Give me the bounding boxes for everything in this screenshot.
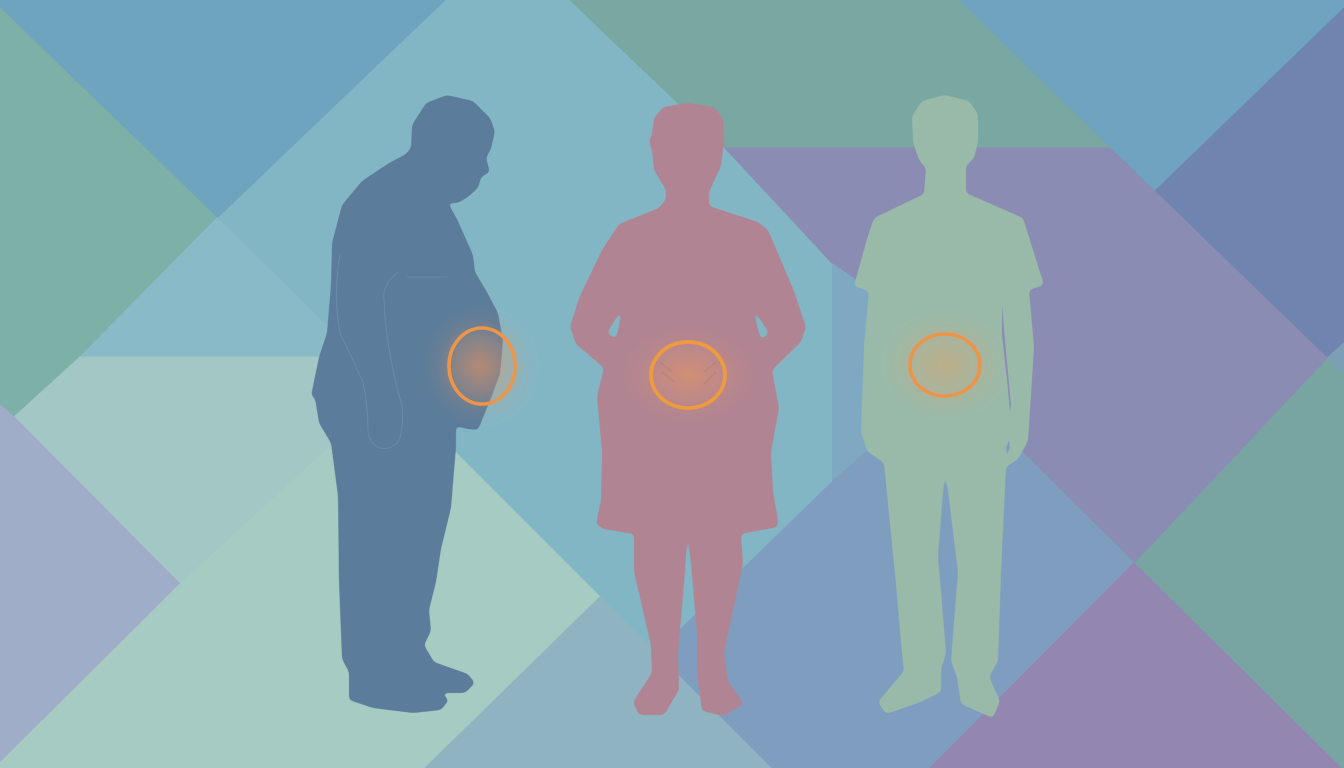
gap between arm and torso: [1002, 305, 1011, 412]
slim man abdomen glow: [879, 309, 1011, 421]
figure: slim man facing front: [854, 95, 1044, 718]
man abdomen ring: [449, 328, 515, 404]
slim man abdomen ring: [910, 334, 980, 396]
woman abdomen glow: [616, 325, 760, 425]
woman abdomen ring: [651, 342, 725, 408]
figure: man in side profile: [311, 95, 540, 713]
woman abdomen crease marks: [660, 362, 716, 384]
man arm contour lines: [336, 255, 447, 449]
man silhouette: [311, 95, 503, 713]
woman silhouette: [570, 103, 806, 716]
slim man silhouette: [854, 95, 1044, 718]
figure: woman facing front: [570, 103, 806, 716]
man abdomen glow: [420, 304, 540, 428]
gap at wrist: [1006, 440, 1010, 454]
